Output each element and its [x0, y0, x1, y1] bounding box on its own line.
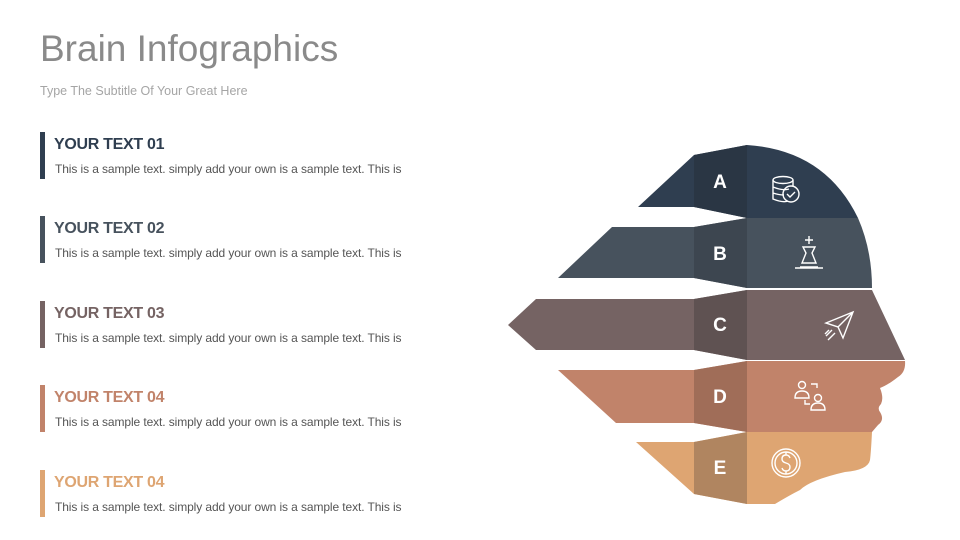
title: Brain Infographics: [40, 28, 338, 69]
band B: B: [713, 244, 727, 265]
item 03: [40, 301, 445, 348]
band E: E: [714, 458, 726, 479]
band A: [638, 145, 858, 218]
item 03: YOUR TEXT 03: [54, 305, 164, 322]
item 05: YOUR TEXT 04: [54, 474, 164, 491]
item 01: YOUR TEXT 01: [54, 136, 164, 153]
icon: chess king: [795, 236, 823, 268]
band E: [636, 432, 872, 504]
item 02: YOUR TEXT 02: [54, 220, 164, 237]
subtitle: Type The Subtitle Of Your Great Here: [40, 84, 248, 98]
item 02: [40, 216, 445, 263]
band D: [558, 361, 905, 432]
icon: paper plane: [825, 312, 853, 340]
item 02: This is a sample text. simply add your own is a sample text. This is: [55, 246, 401, 260]
band C: C: [713, 315, 727, 336]
item 04: [40, 385, 445, 432]
item 01: This is a sample text. simply add your own is a sample text. This is: [55, 162, 401, 176]
icon: people exchange: [795, 382, 825, 410]
band A: A: [713, 172, 727, 193]
item 01: [40, 132, 445, 179]
band C: [508, 290, 905, 360]
item 05: [40, 470, 445, 517]
item 04: YOUR TEXT 04: [54, 389, 164, 406]
icon: dollar coin: [772, 449, 800, 477]
item 05: This is a sample text. simply add your own is a sample text. This is: [55, 500, 401, 514]
item 04: This is a sample text. simply add your own is a sample text. This is: [55, 415, 401, 429]
band D: D: [713, 387, 727, 408]
band B: [558, 218, 872, 288]
item 03: This is a sample text. simply add your own is a sample text. This is: [55, 331, 401, 345]
icon: database check: [773, 176, 799, 202]
